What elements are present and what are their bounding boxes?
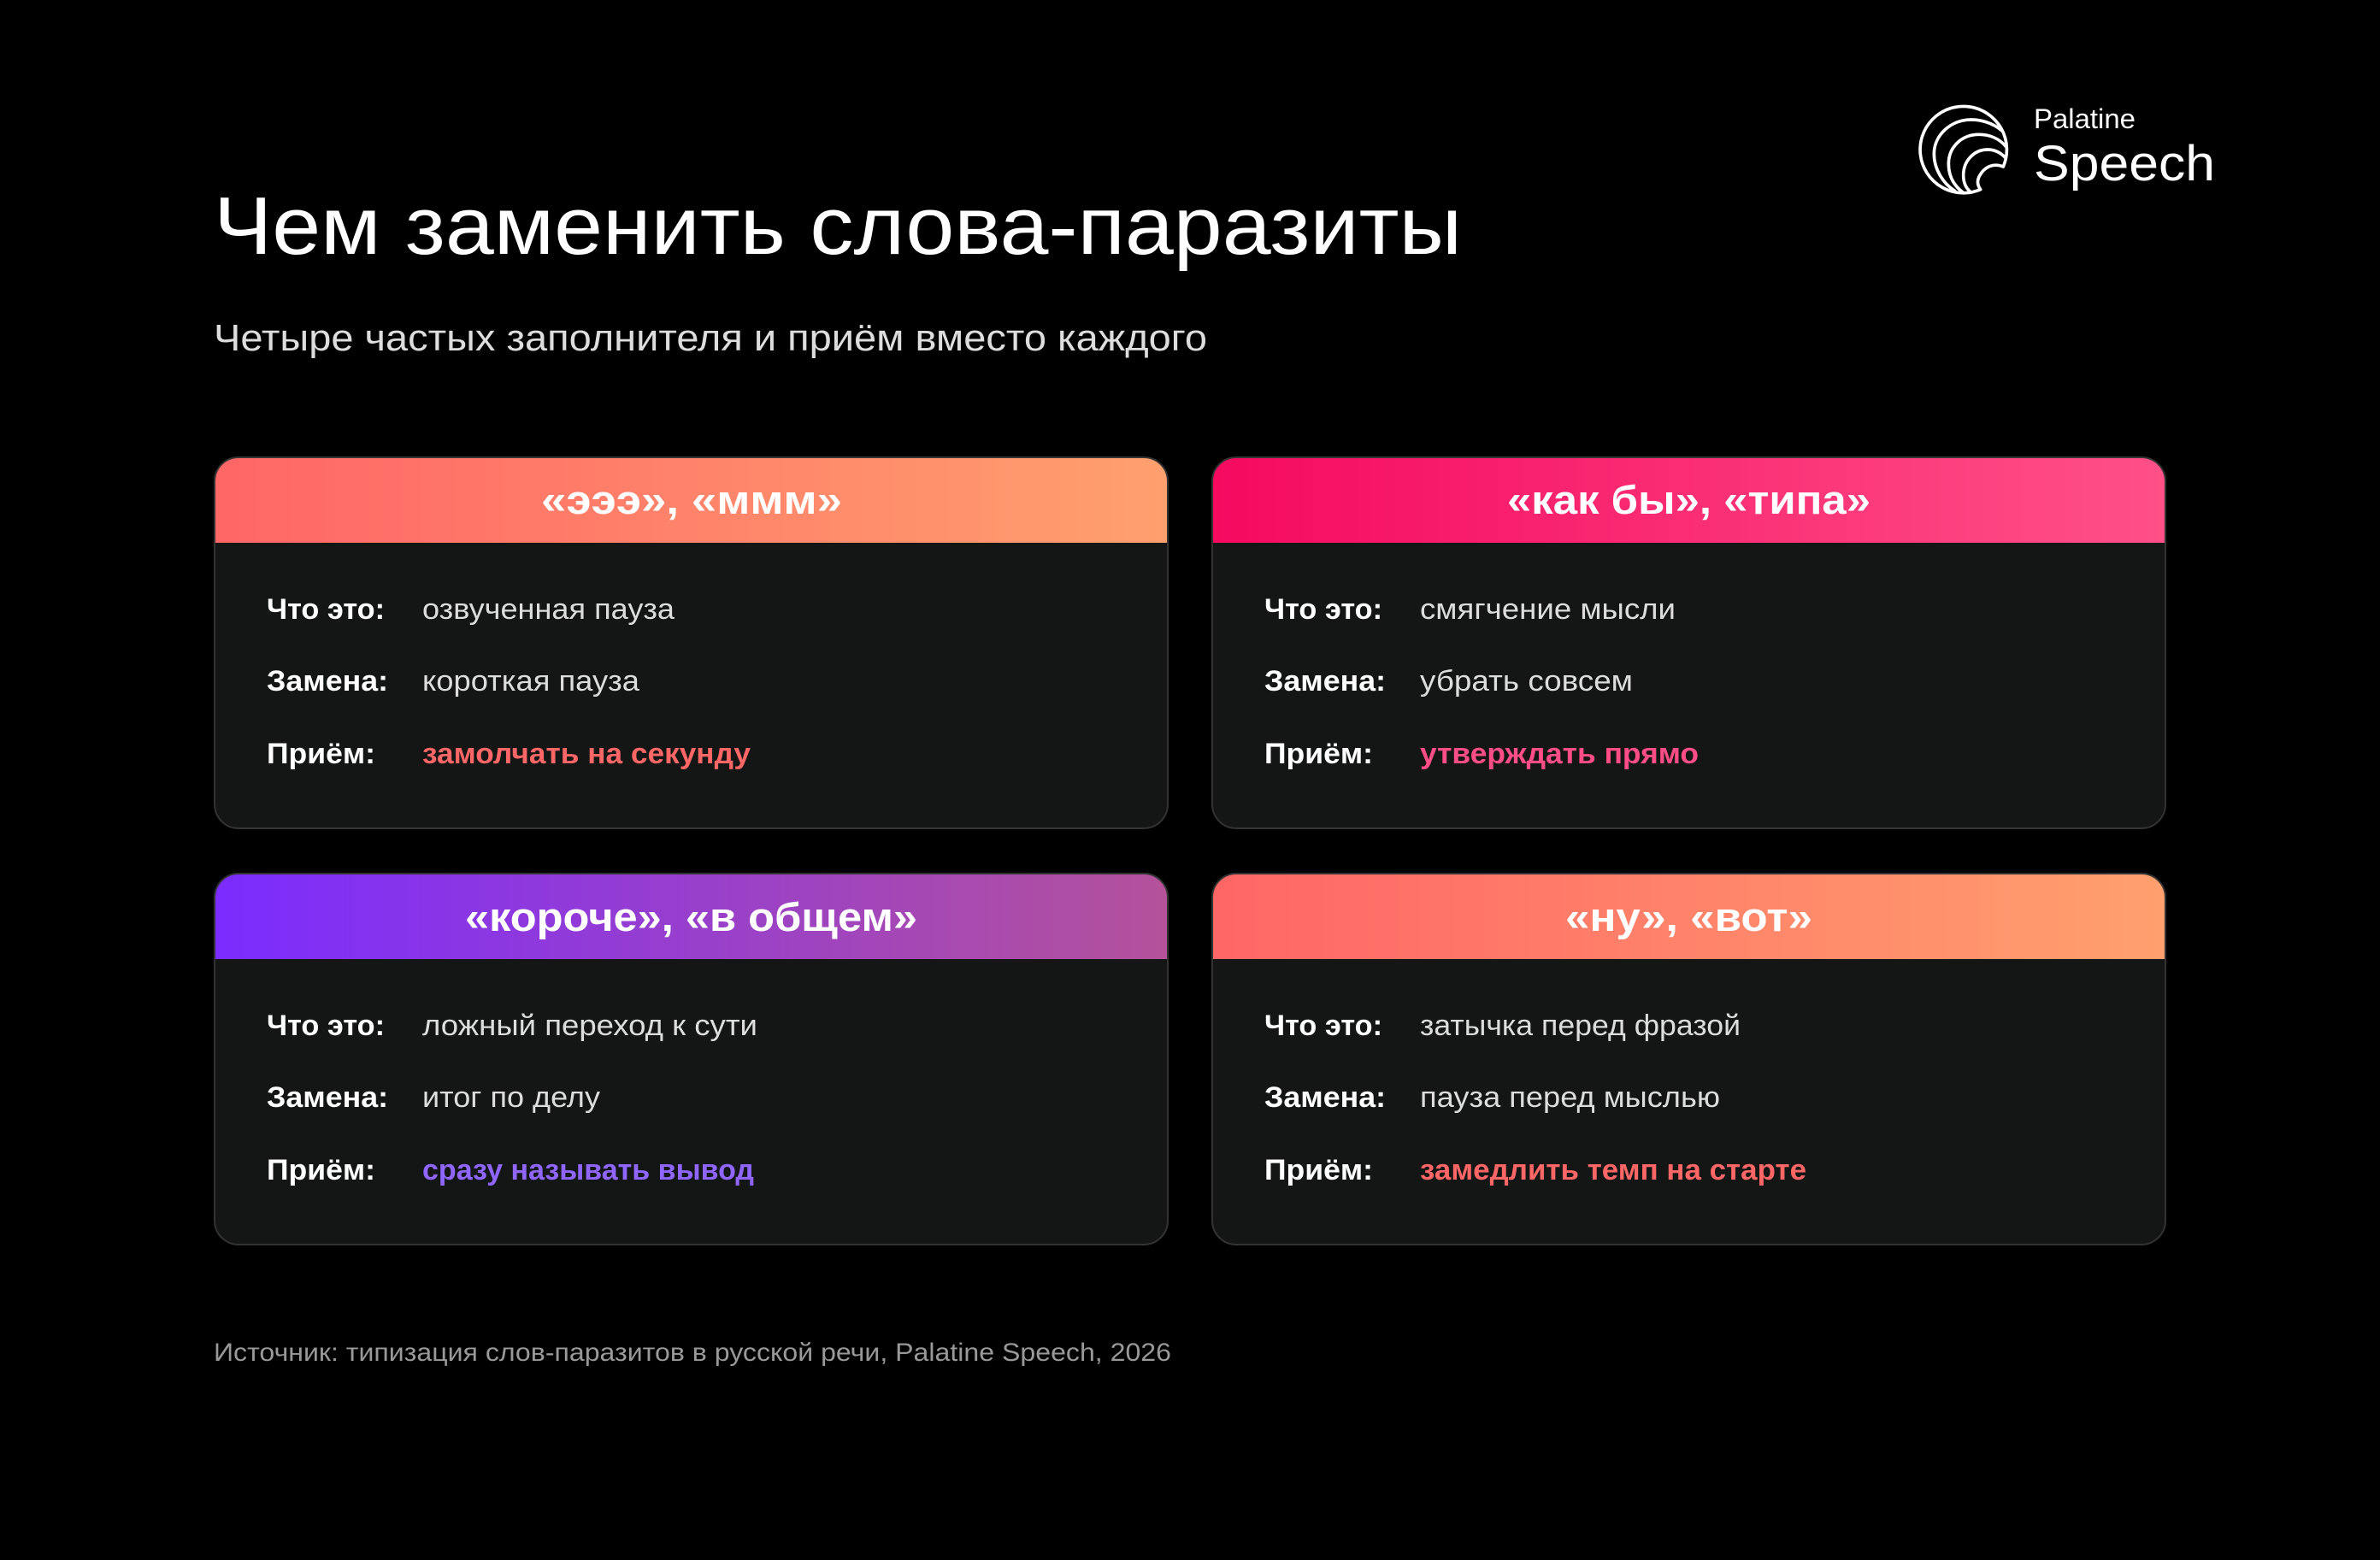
row: приём	[267, 1154, 754, 1186]
row: приём: замолчать на секунду	[422, 738, 751, 770]
row: замена: итог по делу	[422, 1081, 600, 1114]
row: приём	[1264, 738, 1699, 770]
title: Чем заменить слова-паразиты	[214, 180, 1462, 272]
row: приём: утверждать прямо	[1420, 738, 1699, 770]
row: замена	[267, 1081, 600, 1114]
panel heading: «эээ», «ммм»	[541, 477, 842, 522]
row: замена: Замена:	[1264, 665, 1386, 698]
panel: ну, вот	[1212, 874, 2165, 1245]
panel heading: «короче», «в общем»	[465, 894, 917, 939]
row: приём: Приём:	[1264, 738, 1373, 770]
row: что это	[267, 1010, 757, 1042]
source note: Источник: типизация слов-паразитов в русской речи, Palatine Speech, 2026	[214, 1339, 1171, 1367]
row: замена: короткая пауза	[422, 665, 639, 698]
logo text: Palatine: Palatine	[2034, 103, 2136, 134]
row: что это	[267, 593, 675, 626]
row: замена: Замена:	[267, 665, 388, 698]
panel header	[1212, 874, 2165, 959]
row: что это: Что это:	[1264, 593, 1382, 626]
panel heading: «как бы», «типа»	[1507, 477, 1870, 522]
row: приём	[1264, 1154, 1806, 1186]
panel: эээ, ммм	[215, 457, 1168, 828]
row: что это: озвученная пауза	[422, 593, 675, 626]
row: замена: пауза перед мыслью	[1420, 1081, 1720, 1114]
row: замена: Замена:	[267, 1081, 388, 1114]
row: приём: Приём:	[267, 738, 375, 770]
panel header	[215, 457, 1168, 543]
row: приём	[267, 738, 751, 770]
logo text: Speech: Speech	[2034, 136, 2215, 191]
icon: shell waves	[1920, 106, 2006, 193]
row: что это: Что это:	[267, 593, 385, 626]
panel: как бы, типа	[1212, 457, 2165, 828]
row: приём: сразу называть вывод	[422, 1154, 754, 1186]
panel heading: «ну», «вот»	[1565, 894, 1812, 939]
row: приём: Приём:	[1264, 1154, 1373, 1186]
row: замена	[267, 665, 639, 698]
row: замена: Замена:	[1264, 1081, 1386, 1114]
row: что это: Что это:	[1264, 1010, 1382, 1042]
row: что это: Что это:	[267, 1010, 385, 1042]
subtitle: Четыре частых заполнителя и приём вместо каждого	[214, 317, 1207, 359]
row: что это: ложный переход к сути	[422, 1010, 757, 1042]
panel header	[215, 874, 1168, 959]
row: приём: Приём:	[267, 1154, 375, 1186]
row: что это	[1264, 593, 1676, 626]
row: замена	[1264, 1081, 1720, 1114]
row: замена	[1264, 665, 1633, 698]
row: приём: замедлить темп на старте	[1420, 1154, 1806, 1186]
row: что это	[1264, 1010, 1741, 1042]
panel: короче, в общем	[215, 874, 1168, 1245]
row: что это: смягчение мысли	[1420, 593, 1676, 626]
logo: Palatine Speech	[1920, 103, 2215, 193]
row: замена: убрать совсем	[1420, 665, 1633, 698]
panel header	[1212, 457, 2165, 543]
row: что это: затычка перед фразой	[1420, 1010, 1741, 1042]
